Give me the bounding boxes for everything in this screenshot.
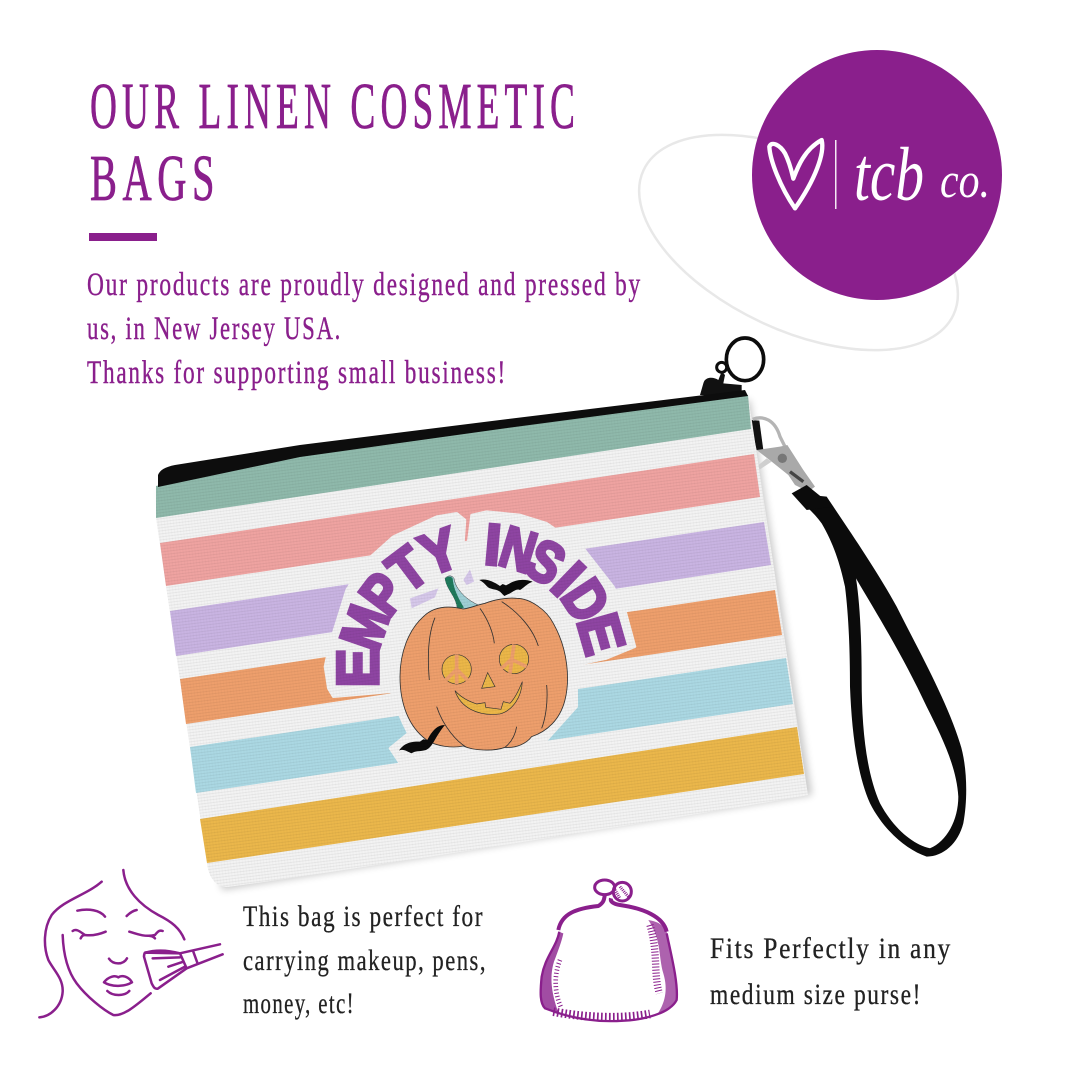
caption: makeup: carrying makeup, pens, — [243, 944, 487, 977]
intro paragraph — [87, 267, 642, 391]
clasp and key ring — [700, 338, 833, 510]
curved text: EMPTY INSIDE: S — [514, 526, 576, 599]
decorative orbit ellipse — [606, 90, 991, 395]
title: BAGS — [90, 142, 220, 215]
curved text: EMPTY INSIDE: P — [348, 561, 419, 627]
bag body — [156, 395, 808, 887]
icon: coin purse — [540, 880, 677, 1021]
pumpkin stem — [445, 576, 478, 609]
title — [90, 70, 580, 215]
logo wordmark: co. — [940, 152, 990, 208]
icon: heart — [769, 140, 822, 208]
curved text: EMPTY INSIDE: D — [549, 568, 622, 633]
product: cosmetic bag — [156, 338, 966, 890]
pumpkin mouth — [455, 682, 522, 714]
curved text: EMPTY INSIDE: E — [564, 606, 637, 661]
icon: face with makeup brush — [39, 870, 223, 1017]
curved text: EMPTY INSIDE: E — [326, 649, 391, 687]
curved text: EMPTY INSIDE: I — [539, 550, 596, 608]
curved text: EMPTY INSIDE: Y — [411, 515, 468, 588]
sticker design — [325, 512, 637, 763]
icon: bat top — [479, 580, 533, 596]
pumpkin nose — [482, 673, 495, 688]
caption: purse: Fits Perfectly in any — [710, 932, 952, 965]
bag shadow — [160, 400, 812, 890]
caption: makeup — [243, 900, 487, 1020]
curved text: EMPTY INSIDE: T — [375, 533, 440, 605]
icon: bat bottom — [399, 725, 445, 753]
caption: makeup: This bag is perfect for — [243, 900, 484, 933]
strap — [795, 493, 966, 857]
curved text: EMPTY INSIDE — [326, 512, 637, 687]
intro paragraph: Thanks for supporting small business! — [87, 355, 507, 391]
pumpkin illustration — [400, 576, 568, 750]
pumpkin eyes: peace signs — [442, 644, 529, 684]
pumpkin body — [400, 598, 568, 750]
curved text: EMPTY INSIDE: N — [492, 514, 544, 586]
caption: purse: medium size purse! — [710, 978, 922, 1011]
caption: makeup: money, etc! — [243, 987, 355, 1020]
logo badge — [752, 50, 1002, 300]
title underline bar — [89, 233, 157, 241]
title: OUR LINEN COSMETIC — [90, 70, 580, 143]
intro paragraph: Our products are proudly designed and pressed by — [87, 267, 642, 303]
curved text: EMPTY INSIDE: I — [482, 512, 504, 578]
caption: purse — [710, 932, 952, 1011]
linen texture overlay — [156, 395, 808, 887]
sticker white backing — [325, 512, 635, 763]
intro paragraph: us, in New Jersey USA. — [87, 311, 342, 347]
stripes — [156, 395, 804, 863]
zipper — [158, 390, 748, 487]
curved text: EMPTY INSIDE: M — [328, 598, 403, 658]
logo wordmark: tcb — [854, 133, 924, 217]
